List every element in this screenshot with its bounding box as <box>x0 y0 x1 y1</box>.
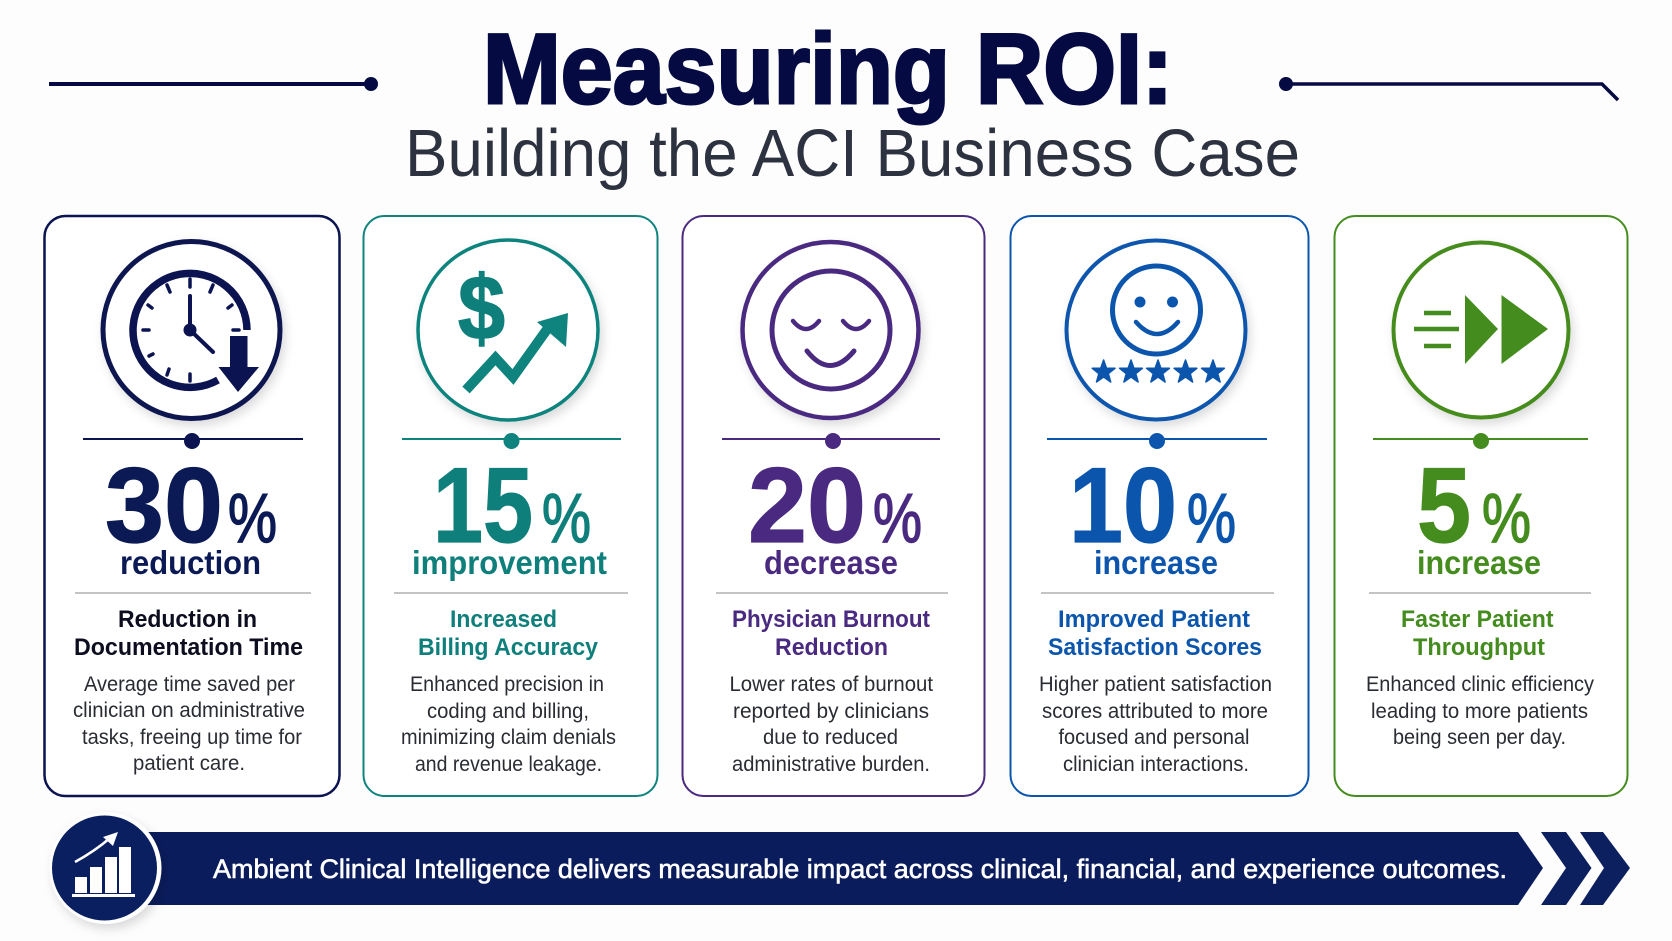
stat: 20%: 20 <box>748 445 866 565</box>
description: focused and personal <box>1058 726 1250 749</box>
stat label: improvement <box>412 544 607 581</box>
stat: 30%: 30 <box>105 445 223 565</box>
stat label: reduction <box>120 544 261 581</box>
heading: Satisfaction Scores <box>1048 634 1262 661</box>
card border <box>44 216 340 796</box>
description: Average time saved per <box>84 673 295 696</box>
description: Enhanced clinic efficiency <box>1366 673 1594 696</box>
heading: Documentation Time <box>74 634 303 661</box>
stat: 30%: % <box>228 479 277 557</box>
panel: billing accuracy <box>364 216 658 796</box>
divider <box>722 433 940 449</box>
icon: clock with down arrow <box>103 242 280 418</box>
divider <box>402 433 621 449</box>
description: administrative burden. <box>732 753 930 776</box>
title: Measuring ROI: <box>483 13 1173 124</box>
description: clinician interactions. <box>1063 753 1249 776</box>
description: due to reduced <box>763 726 898 749</box>
divider <box>83 433 303 449</box>
icon: smiley with five stars <box>1066 240 1246 420</box>
stat: 5%: 5 <box>1417 445 1471 565</box>
description <box>1039 673 1272 776</box>
card border <box>364 216 658 796</box>
icon: fast forward <box>1394 242 1568 418</box>
heading: Reduction <box>775 634 888 661</box>
card border <box>1334 216 1628 796</box>
description: and revenue leakage. <box>415 753 602 776</box>
subtitle: Building the ACI Business Case <box>405 116 1300 191</box>
description <box>730 673 933 776</box>
stat: 20%: % <box>873 479 922 557</box>
heading <box>732 606 930 661</box>
description: reported by clinicians <box>733 700 929 723</box>
icon: calm face <box>742 242 918 418</box>
description <box>1366 673 1594 749</box>
description: patient care. <box>133 752 245 775</box>
stat: 30% <box>105 445 277 565</box>
stat: 10%: % <box>1187 479 1236 557</box>
panel: documentation time <box>44 216 340 796</box>
heading <box>1048 606 1262 661</box>
heading: Increased <box>450 606 557 633</box>
heading: Reduction in <box>118 606 257 633</box>
heading: Billing Accuracy <box>418 634 599 661</box>
heading <box>1401 606 1554 661</box>
stat: 5%: % <box>1482 479 1531 557</box>
heading: Improved Patient <box>1058 606 1250 633</box>
description <box>73 673 305 775</box>
description: coding and billing, <box>427 700 589 723</box>
stat: 5% <box>1417 445 1531 565</box>
heading <box>418 606 599 661</box>
heading <box>74 606 303 661</box>
heading: Throughput <box>1413 634 1545 661</box>
left title rule <box>49 77 378 91</box>
panel: patient throughput <box>1334 216 1628 796</box>
heading: Physician Burnout <box>732 606 930 633</box>
card border <box>682 216 984 796</box>
divider <box>1047 433 1267 449</box>
description: leading to more patients <box>1371 700 1588 723</box>
stat label: decrease <box>764 544 898 581</box>
stat: 15%: % <box>542 479 591 557</box>
banner message: Ambient Clinical Intelligence delivers measurable impact across clinical, financial, and experience outcomes. <box>213 854 1507 884</box>
divider <box>1373 433 1588 449</box>
stat label: increase <box>1417 544 1541 581</box>
description: Higher patient satisfaction <box>1039 673 1272 696</box>
description: scores attributed to more <box>1042 700 1268 723</box>
description: Lower rates of burnout <box>730 673 933 696</box>
stat: 20% <box>748 445 922 565</box>
banner chevrons <box>1541 832 1630 905</box>
panel: physician burnout <box>682 216 984 796</box>
stat label: increase <box>1094 544 1218 581</box>
description: clinician on administrative <box>73 699 305 722</box>
right title rule <box>1279 77 1618 100</box>
stat: 10%: 10 <box>1069 445 1177 565</box>
heading: Faster Patient <box>1401 606 1554 633</box>
card border <box>1010 216 1308 796</box>
description: being seen per day. <box>1393 726 1566 749</box>
panel: patient satisfaction <box>1010 216 1308 796</box>
icon: bar chart badge <box>50 812 162 924</box>
stat: 15%: 15 <box>433 445 533 565</box>
icon: dollar and rising arrow: $ <box>458 258 505 359</box>
description: minimizing claim denials <box>401 726 616 749</box>
description: tasks, freeing up time for <box>82 726 302 749</box>
icon: dollar and rising arrow <box>418 240 598 420</box>
description <box>401 673 616 776</box>
banner arrow <box>140 832 1543 905</box>
description: Enhanced precision in <box>410 673 604 696</box>
